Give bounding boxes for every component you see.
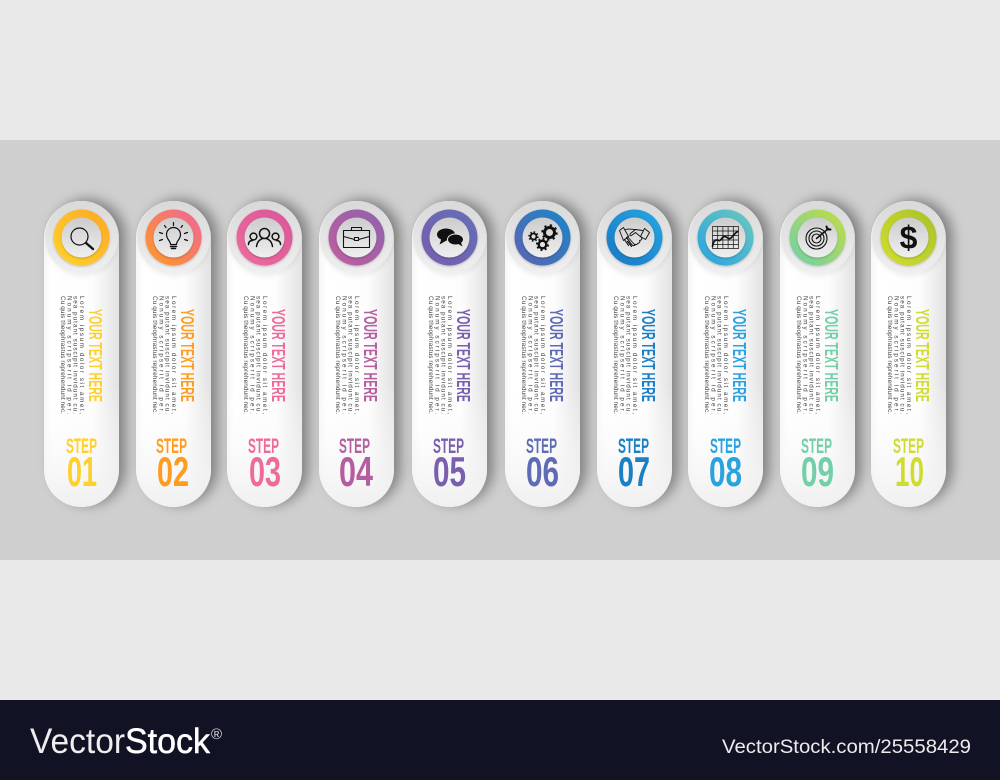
ring 06 [514,210,570,266]
icon: line chart [712,226,738,248]
body text 07 [612,296,638,414]
body text 02 [151,296,177,414]
footer image id: VectorStock.com/25558429 [722,737,971,758]
body text 01 [59,296,85,414]
body text 06 [520,296,546,414]
top background band [0,0,1000,140]
body text 03: sea putant suscipit invidunt cu. [254,296,262,414]
step label 05: STEP [433,435,464,458]
step label 07: STEP [618,435,649,458]
body text 05: Cu quis theophrastus reprehendunt nec. [427,296,434,414]
heading 02: YOUR TEXT HERE [177,309,197,402]
body text 06: Nonumy scripserit id per. [526,296,534,414]
icon: people [248,228,280,246]
step number 09: 09 [801,448,834,495]
body text 05: Lorem ipsum dolor sit amet, [446,296,453,414]
panel: step 08 [688,201,763,507]
icon: handshake [620,228,650,246]
heading 06: YOUR TEXT HERE [546,309,566,402]
body text 10 [886,296,912,414]
step label 02: STEP [156,435,187,458]
heading 09: YOUR TEXT HERE [821,309,841,402]
body text 01: sea putant suscipit invidunt cu. [72,296,78,414]
ring 08 [698,210,754,266]
step number 08: 08 [709,448,742,495]
body text 04 [334,296,360,414]
body text 08: sea putant suscipit invidunt cu. [716,296,722,414]
panel: step 02 [136,201,211,507]
heading 05: YOUR TEXT HERE [453,309,473,402]
body text 04: Cu quis theophrastus reprehendunt nec. [334,296,341,414]
panel: step 01 [44,201,119,507]
body text 10: Nonumy scripserit id per. [892,296,900,414]
body text 07: sea putant suscipit invidunt cu. [624,296,632,414]
ring 10 [880,210,936,266]
footer logo: ® [211,726,222,743]
body text 07: Lorem ipsum dolor sit amet, [631,296,638,414]
body text 02: sea putant suscipit invidunt cu. [164,296,170,414]
panel: step 05 [412,201,487,507]
footer logo [30,722,222,761]
ring 02 [146,210,202,266]
body text 09: Nonumy scripserit id per. [802,296,808,414]
ring 03 [236,210,292,266]
body text 10: Lorem ipsum dolor sit amet, [905,296,912,414]
ring 07 [606,210,662,266]
step label 01: STEP [66,435,97,458]
body text 05 [427,296,453,414]
body text 08: Nonumy scripserit id per. [710,296,716,414]
body text 03 [242,296,268,414]
lower background band [0,560,1000,700]
ring 05 [422,210,478,266]
body text 07: Cu quis theophrastus reprehendunt nec. [612,296,619,414]
icon: magnifier [71,228,93,249]
step number 02: 02 [157,448,189,495]
step label 04: STEP [339,435,370,458]
body text 02: Nonumy scripserit id per. [158,296,164,414]
ring 01 [54,210,110,266]
footer bar [0,700,1000,780]
body text 06: sea putant suscipit invidunt cu. [532,296,540,414]
body text 03: Cu quis theophrastus reprehendunt nec. [242,296,249,414]
heading 08: YOUR TEXT HERE [729,309,749,402]
body text 10: sea putant suscipit invidunt cu. [898,296,906,414]
icon: gears [529,226,556,250]
step number 07: 07 [618,448,650,495]
step label 06: STEP [526,435,557,458]
heading 04: YOUR TEXT HERE [360,309,380,402]
heading 01: YOUR TEXT HERE [85,309,105,402]
heading 10: YOUR TEXT HERE [912,309,932,402]
body text 05: Nonumy scripserit id per. [434,296,440,414]
step label 08: STEP [710,435,741,458]
footer logo: Stock [125,722,210,761]
step number 04: 04 [339,448,373,495]
heading 03: YOUR TEXT HERE [268,309,288,402]
central grey panel [0,140,1000,560]
step number 03: 03 [249,448,281,495]
panel: step 03 [227,201,302,507]
body text 07: Nonumy scripserit id per. [618,296,626,414]
body text 06: Lorem ipsum dolor sit amet, [539,296,546,414]
step number 10: 10 [895,448,924,495]
body text 01: Nonumy scripserit id per. [66,296,72,414]
body text 08: Cu quis theophrastus reprehendunt nec. [703,296,710,414]
body text 06: Cu quis theophrastus reprehendunt nec. [520,296,527,414]
icon: dollar sign: $ [900,220,918,256]
icon: speech bubbles [437,228,464,246]
body text 02: Cu quis theophrastus reprehendunt nec. [151,296,158,414]
body text 09 [795,296,821,414]
panel: step 06 [505,201,580,507]
heading 07: YOUR TEXT HERE [638,309,658,402]
body text 04: Nonumy scripserit id per. [340,296,348,414]
step number 06: 06 [526,448,559,495]
body text 04: sea putant suscipit invidunt cu. [346,296,354,414]
panel: step 07 [597,201,672,507]
footer logo: Vector [30,722,125,761]
step label 03: STEP [248,435,279,458]
icon: briefcase [344,228,370,248]
body text 03: Lorem ipsum dolor sit amet, [261,296,268,414]
step label 09: STEP [801,435,832,458]
body text 01: Cu quis theophrastus reprehendunt nec. [59,296,66,414]
body text 09: Lorem ipsum dolor sit amet, [814,296,821,414]
step number 01: 01 [67,448,97,495]
body text 02: Lorem ipsum dolor sit amet, [170,296,177,414]
body text 08: Lorem ipsum dolor sit amet, [722,296,729,414]
body text 01: Lorem ipsum dolor sit amet, [78,296,85,414]
body text 05: sea putant suscipit invidunt cu. [440,296,446,414]
panel: step 09 [780,201,855,507]
step number 05: 05 [433,448,466,495]
panel: step 04 [319,201,394,507]
body text 09: sea putant suscipit invidunt cu. [808,296,814,414]
icon: light bulb [160,222,188,248]
body text 08 [703,296,729,414]
body text 09: Cu quis theophrastus reprehendunt nec. [795,296,802,414]
icon: target [806,226,830,249]
ring 04 [328,210,384,266]
step label 10: STEP [893,435,924,458]
ring 09 [790,210,846,266]
body text 03: Nonumy scripserit id per. [248,296,256,414]
panel: step 10 [871,201,946,507]
body text 10: Cu quis theophrastus reprehendunt nec. [886,296,893,414]
body text 04: Lorem ipsum dolor sit amet, [353,296,360,414]
